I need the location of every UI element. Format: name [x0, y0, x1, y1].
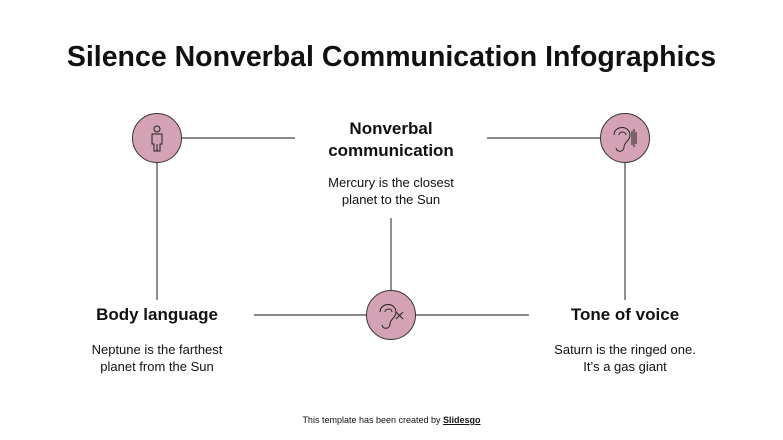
icon: person: [132, 113, 182, 163]
text: tone of voice: It’s a gas giant: [583, 359, 667, 374]
text: nonverbal communication: Nonverbal: [349, 119, 433, 138]
text: tone of voice: [554, 305, 696, 374]
text: body language: Neptune is the farthest: [92, 342, 222, 357]
text: body language: planet from the Sun: [100, 359, 214, 374]
icon: ear with sound: [600, 113, 650, 163]
icon: muted ear: [366, 290, 416, 340]
footer: This template has been created by Slidesgo: [302, 415, 481, 425]
text: nonverbal communication: [328, 119, 454, 207]
text: body language: [92, 305, 222, 374]
text: body language: Body language: [96, 305, 218, 324]
title: Silence Nonverbal Communication Infographics: [67, 41, 716, 73]
text: tone of voice: Saturn is the ringed one.: [554, 342, 696, 357]
text: tone of voice: Tone of voice: [571, 305, 679, 324]
text: nonverbal communication: Mercury is the closest: [328, 175, 454, 190]
text: nonverbal communication: communication: [328, 141, 454, 160]
text: nonverbal communication: planet to the Sun: [342, 192, 440, 207]
